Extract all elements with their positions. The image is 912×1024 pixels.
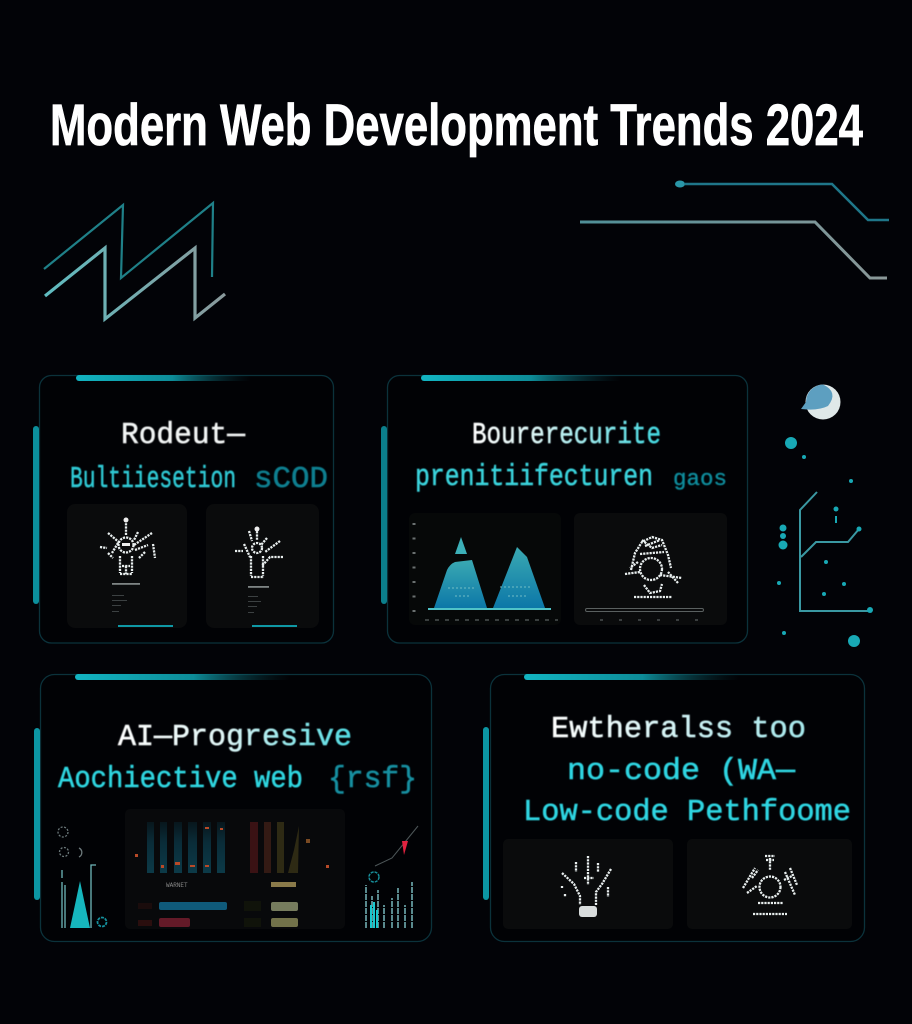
top accent bar (76, 375, 251, 381)
sub-panel right (687, 839, 852, 929)
panel: card top right (381, 375, 748, 643)
icon: dotted circuit hand (562, 856, 611, 917)
top accent bar (421, 375, 621, 381)
top accent bar (524, 674, 739, 680)
heading: Rodeut— (121, 418, 245, 453)
icon: dotted robot (100, 518, 155, 574)
subheading: Aochiective web (58, 762, 303, 797)
decoration: circuit lines top right (580, 180, 889, 278)
sub-panel left (67, 504, 187, 628)
tick labels (600, 619, 710, 621)
icon: dotted ring (625, 537, 682, 597)
subheading line 3: Low-code Pethfoome (523, 795, 851, 830)
subheading suffix: sCOD (254, 462, 328, 497)
text lines (248, 586, 269, 613)
panel: card bottom right (483, 674, 864, 942)
area chart (414, 523, 558, 620)
left mini chart (58, 827, 106, 928)
heading: Ewtheralss too (551, 712, 806, 747)
sub-panel left (503, 839, 673, 929)
left accent bar (381, 426, 387, 604)
heading: AI—Progresive (118, 720, 352, 755)
decoration: zigzag lines (44, 203, 225, 319)
icon: dotted ring (743, 856, 797, 914)
sub-panel: area chart (409, 513, 561, 625)
slider track (586, 608, 704, 612)
text lines (112, 583, 140, 612)
label rows: WARNET (166, 882, 188, 889)
orange markers (135, 827, 329, 868)
panel: card bottom left (34, 674, 432, 942)
left accent bar (33, 426, 39, 604)
cyan caption (118, 625, 173, 627)
dashboard panel (125, 809, 345, 929)
subheading suffix: gaos (673, 467, 727, 492)
left accent bar (34, 728, 40, 900)
sub-panel right (206, 504, 319, 628)
blue bars (147, 822, 225, 873)
right mini chart (366, 826, 418, 928)
panel: card top left (33, 375, 334, 643)
subheading line 2: no-code (WA— (567, 754, 795, 789)
cyan caption (252, 625, 297, 627)
heading: Bourerecurite (472, 418, 661, 453)
top accent bar (75, 674, 290, 680)
sub-panel: dotted ring icon (574, 513, 727, 625)
progress bars (159, 902, 227, 910)
subheading: prenitiifecturen (415, 460, 653, 495)
left accent bar (483, 727, 489, 900)
circuit diagram (777, 437, 873, 647)
icon: moon (801, 384, 840, 420)
icon: dotted robot (235, 526, 283, 577)
subheading: Bultiiesetion (70, 462, 236, 497)
subheading suffix: {rsf} (328, 762, 417, 797)
red bars (250, 822, 299, 873)
